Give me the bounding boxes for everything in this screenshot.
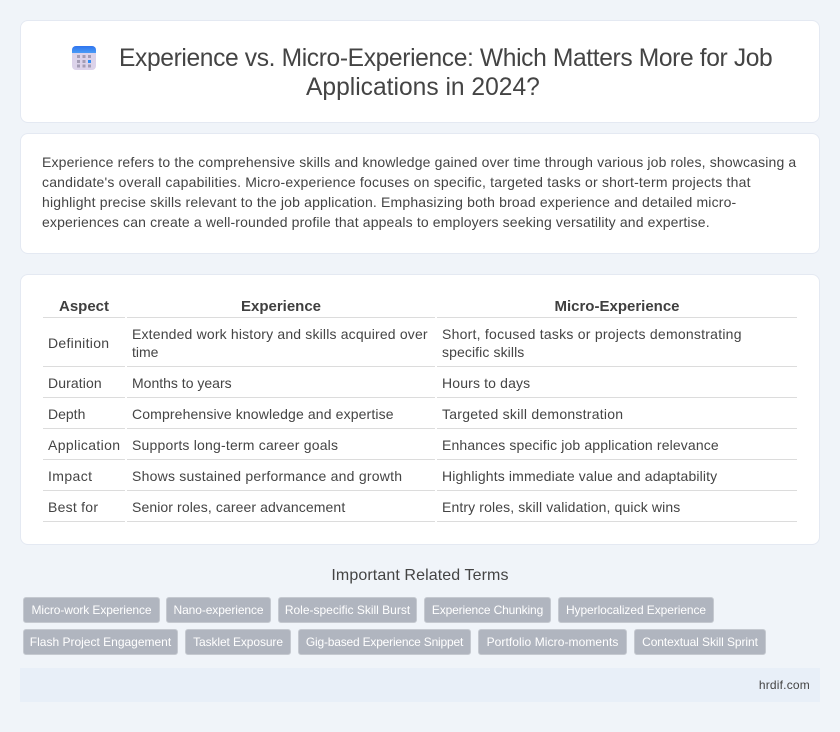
panel: intro paragraph	[20, 133, 820, 254]
row: Definition: time	[132, 344, 158, 360]
text block: intro	[42, 154, 796, 230]
tag: Experience Chunking	[432, 603, 543, 617]
row: Definition	[48, 326, 742, 360]
row: Definition: Definition	[48, 335, 109, 351]
row: Application	[48, 437, 719, 453]
table header row: Aspect	[59, 298, 109, 315]
comparison table	[43, 298, 797, 522]
row: Best for: Senior roles, career advancement	[132, 499, 345, 515]
row: Duration: Months to years	[132, 375, 232, 391]
tag: Gig-based Experience Snippet	[306, 635, 463, 649]
text block: intro: Experience refers to the comprehensive skills and knowledge gained over time through various job roles, showcasing a	[42, 154, 796, 170]
tag	[424, 597, 551, 623]
table header row: Experience	[241, 298, 321, 315]
header panel	[20, 20, 820, 123]
row: Best for	[48, 499, 680, 515]
row: Impact	[48, 468, 718, 484]
tag: Hyperlocalized Experience	[566, 603, 706, 617]
tag	[558, 597, 714, 623]
tag	[478, 629, 627, 655]
tag: Contextual Skill Sprint	[642, 635, 758, 649]
title: Applications in 2024?	[306, 74, 540, 101]
tag	[278, 597, 417, 623]
related terms tags	[23, 597, 766, 655]
row: Definition: Extended work history and skills acquired over	[132, 326, 428, 342]
row: Definition: specific skills	[442, 344, 524, 360]
tag: Flash Project Engagement	[30, 635, 171, 649]
row: Application: Supports long-term career goals	[132, 437, 338, 453]
tag	[23, 629, 178, 655]
row: Depth: Depth	[48, 406, 85, 422]
row: Duration: Duration	[48, 375, 102, 391]
title: Experience vs. Micro-Experience: Which Matters More for Job	[119, 45, 772, 72]
heading: related terms: Important Related Terms	[331, 567, 509, 584]
footer bar	[20, 668, 820, 702]
row: Depth	[48, 406, 623, 422]
tag: Role-specific Skill Burst	[285, 603, 410, 617]
text block: intro: highlight precise skills relevant to the job application. Emphasizing both broad experience and detailed micro-	[42, 194, 736, 210]
tag	[185, 629, 291, 655]
panel: comparison table	[20, 274, 820, 545]
row: Impact: Impact	[48, 468, 92, 484]
row: Application: Application	[48, 437, 120, 453]
tag: Nano-experience	[174, 603, 263, 617]
row: Impact: Shows sustained performance and growth	[132, 468, 402, 484]
tag	[298, 629, 471, 655]
row: Best for: Best for	[48, 499, 98, 515]
table header row	[59, 298, 680, 315]
tag	[23, 597, 160, 623]
row: Best for: Entry roles, skill validation, quick wins	[442, 499, 680, 515]
row: Application: Enhances specific job application relevance	[442, 437, 719, 453]
row: Depth: Comprehensive knowledge and expertise	[132, 406, 394, 422]
icon: calendar	[72, 46, 96, 70]
row: Depth: Targeted skill demonstration	[442, 406, 623, 422]
text block: intro: candidate's overall capabilities. Micro-experience focuses on specific, targeted tasks or short-term projects that	[42, 174, 751, 190]
row: Duration	[48, 375, 530, 391]
tag: Portfolio Micro-moments	[487, 635, 618, 649]
text block: intro: experiences can create a well-rounded profile that appeals to employers seeking versatility and expertise.	[42, 214, 710, 230]
tag	[166, 597, 271, 623]
row: Impact: Highlights immediate value and adaptability	[442, 468, 717, 484]
row: Definition: Short, focused tasks or projects demonstrating	[442, 326, 742, 342]
row: Duration: Hours to days	[442, 375, 530, 391]
tag	[634, 629, 766, 655]
table header row: Micro-Experience	[554, 298, 680, 315]
tag: Tasklet Exposure	[193, 635, 283, 649]
title	[119, 45, 772, 101]
tag: Micro-work Experience	[32, 603, 151, 617]
footer source: hrdif.com	[759, 678, 810, 692]
